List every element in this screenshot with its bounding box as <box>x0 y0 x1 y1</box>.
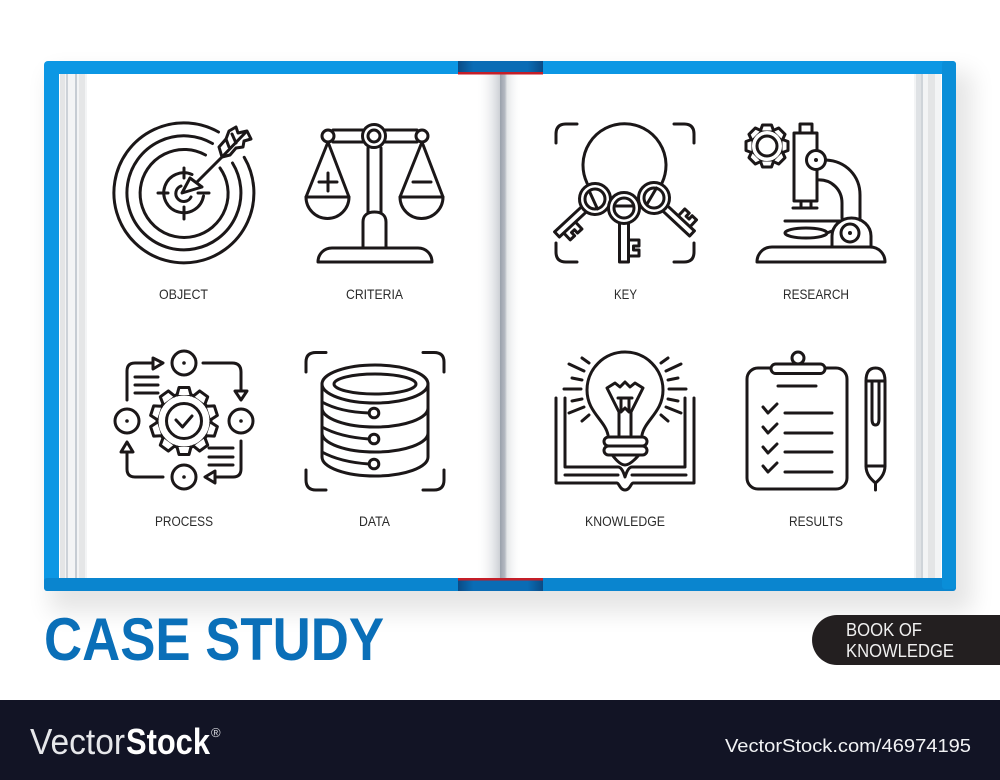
right key <box>632 176 703 245</box>
label: knowledge: KNOWLEDGE <box>585 513 665 529</box>
icon: process cycle <box>115 351 253 489</box>
logo: vectorstock: Stock <box>126 721 211 762</box>
book drop shadow <box>50 72 972 612</box>
badge: book of knowledge: BOOK OF <box>846 620 922 640</box>
book pages <box>59 74 942 578</box>
icon: data cylinder <box>306 352 444 490</box>
icon: knowledge bulb and book <box>556 352 694 490</box>
footer band <box>0 700 1000 780</box>
left key <box>546 177 617 246</box>
book cover <box>44 61 956 591</box>
icon: results clipboard and pen <box>747 352 885 490</box>
title: CASE STUDY <box>44 606 384 673</box>
label: process: PROCESS <box>155 513 213 529</box>
top spine band <box>458 61 543 74</box>
label: key: KEY <box>614 286 638 302</box>
right page edges <box>914 74 941 578</box>
open book <box>44 61 956 591</box>
label: object: OBJECT <box>159 286 208 302</box>
label: results: RESULTS <box>789 513 843 529</box>
icon: object target <box>114 123 254 263</box>
image id: VectorStock.com/46974195 <box>725 736 971 756</box>
label: data: DATA <box>359 513 391 529</box>
left page edges <box>60 74 87 578</box>
label: research: RESEARCH <box>783 286 849 302</box>
logo: vectorstock: ® <box>211 725 221 740</box>
icon: criteria scales <box>306 124 443 262</box>
icon: research microscope <box>746 124 885 262</box>
logo: vectorstock <box>30 721 221 762</box>
badge: book of knowledge <box>812 615 1000 665</box>
bottom spine band <box>458 578 543 591</box>
logo: vectorstock: Vector <box>30 721 125 762</box>
icon: key ring <box>546 124 703 262</box>
spine shadow <box>476 74 522 578</box>
middle key <box>608 192 640 262</box>
badge: book of knowledge: KNOWLEDGE <box>846 641 954 661</box>
label: criteria: CRITERIA <box>346 286 404 302</box>
